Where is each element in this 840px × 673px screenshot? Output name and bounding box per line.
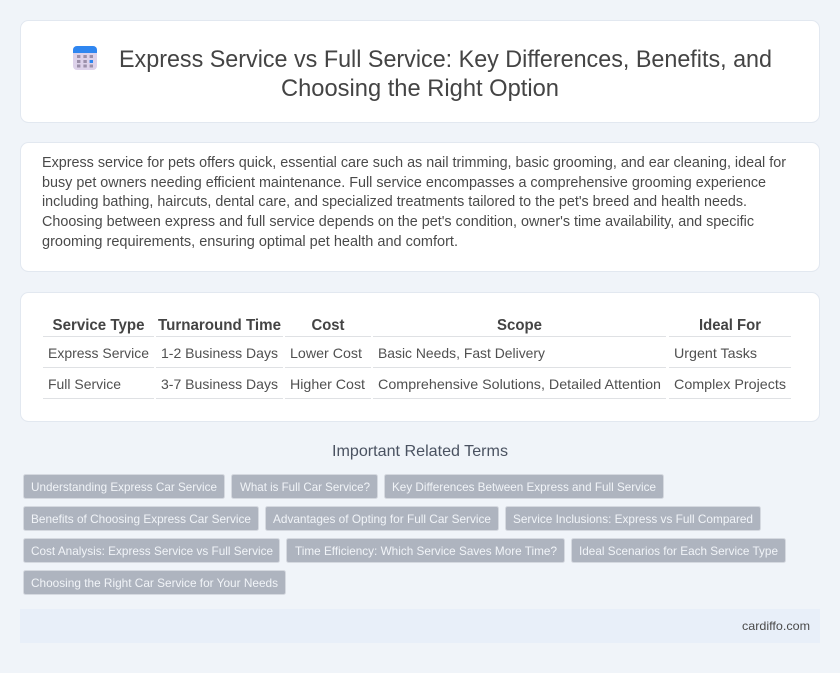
table row: full service: Higher Cost [290, 376, 365, 392]
table row: full service: Full Service [48, 376, 121, 392]
text block: description: grooming requirements, ensuring optimal pet health and comfort. [42, 234, 458, 250]
tag [24, 506, 258, 530]
text block: description: Express service for pets offers quick, essential care such as nail trimming, basic grooming, and ear cleaning, ideal for [42, 155, 786, 171]
table row: express service [48, 345, 757, 361]
tag: Choosing the Right Car Service for Your Needs [31, 576, 278, 590]
table row: full service: Complex Projects [674, 376, 786, 392]
text block: description [42, 155, 786, 250]
tag: What is Full Car Service? [240, 480, 370, 494]
table row: express service: Urgent Tasks [674, 345, 757, 361]
table header: Cost [312, 317, 345, 334]
tag: Key Differences Between Express and Full Service [392, 480, 656, 494]
table row: express service: Lower Cost [290, 345, 362, 361]
table row: express service: Basic Needs, Fast Delivery [378, 345, 545, 361]
table row: full service: Comprehensive Solutions, Detailed Attention [378, 376, 661, 392]
title: Express Service vs Full Service: Key Differences, Benefits, and [119, 46, 772, 73]
tag [232, 474, 378, 498]
tag: Cost Analysis: Express Service vs Full Service [31, 544, 273, 558]
text block: description: Choosing between express and full service depends on the pet's condition, owner's time availability, and specific [42, 214, 754, 230]
table row: full service [48, 376, 786, 392]
icon: calendar [73, 46, 97, 70]
panel: description [20, 142, 820, 272]
footer [20, 609, 820, 643]
text block: description: including bathing, haircuts, dental care, and specialized treatments tailored to the pet's breed and health needs. [42, 194, 747, 210]
tag [384, 474, 664, 498]
table header: Turnaround Time [158, 317, 281, 334]
table row: express service: Express Service [48, 345, 149, 361]
title: Choosing the Right Option [281, 75, 559, 102]
table row: express service: 1-2 Business Days [161, 345, 278, 361]
title [119, 46, 772, 102]
heading: related terms: Important Related Terms [332, 443, 508, 460]
tag: Advantages of Opting for Full Car Service [273, 512, 491, 526]
panel: comparison table [20, 292, 820, 422]
tag group: related terms [24, 474, 786, 594]
table header: Scope [497, 317, 542, 334]
tag: Service Inclusions: Express vs Full Compared [513, 512, 753, 526]
tag: Time Efficiency: Which Service Saves More Time? [295, 544, 557, 558]
table row: full service: 3-7 Business Days [161, 376, 278, 392]
tag [506, 506, 760, 530]
table header: Ideal For [699, 317, 761, 334]
tag [266, 506, 498, 530]
tag: Understanding Express Car Service [31, 480, 217, 494]
tag [24, 570, 286, 594]
text block: description: busy pet owners needing efficient maintenance. Full service encompasses a comprehensive grooming experience [42, 175, 766, 191]
tag: Ideal Scenarios for Each Service Type [579, 544, 778, 558]
table header: Service Type [52, 317, 145, 334]
panel: title card [20, 20, 820, 122]
tag [24, 474, 224, 498]
table header [52, 317, 761, 334]
tag [286, 538, 564, 562]
footer: cardiffo.com [742, 619, 810, 633]
tag: Benefits of Choosing Express Car Service [31, 512, 251, 526]
tag [24, 538, 280, 562]
tag [572, 538, 786, 562]
